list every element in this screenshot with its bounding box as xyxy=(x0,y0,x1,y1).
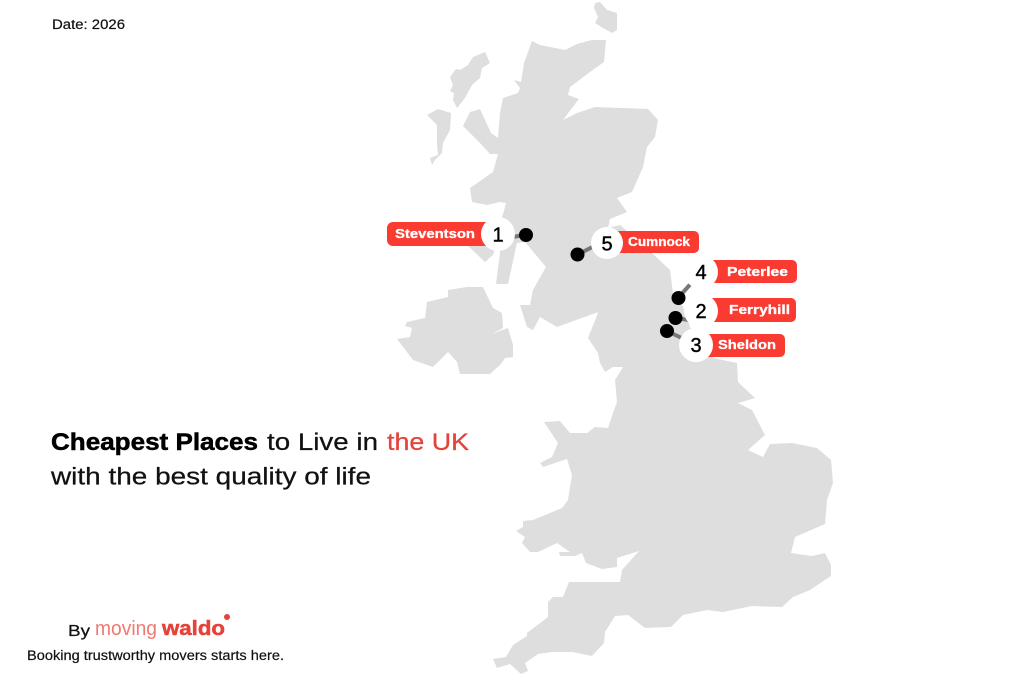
title: Cheapest Places xyxy=(51,429,258,456)
date: Date: 2026 xyxy=(52,17,125,32)
title: with the best quality of life xyxy=(50,464,371,490)
title: to Live in xyxy=(267,429,378,456)
marker 2: Ferryhill xyxy=(668,294,796,328)
marker 1: Steventson xyxy=(387,217,533,251)
marker 5: Cumnock: 5 xyxy=(601,234,613,256)
marker 4: Peterlee: Peterlee xyxy=(727,264,788,279)
tagline: Booking trustworthy movers starts here. xyxy=(27,648,284,663)
map of the UK xyxy=(397,2,833,674)
marker 5: Cumnock xyxy=(570,227,699,262)
Great Britain mainland xyxy=(463,40,833,674)
marker 5: Cumnock: Cumnock xyxy=(628,234,691,249)
moving waldo logo: By xyxy=(68,623,90,640)
marker 1: Steventson: Steventson xyxy=(395,226,475,241)
title xyxy=(50,429,469,490)
marker 4: Peterlee xyxy=(672,255,797,305)
moving waldo logo: moving xyxy=(95,618,157,640)
moving waldo logo: waldo xyxy=(161,618,225,640)
marker 2: Ferryhill: 2 xyxy=(695,301,707,323)
Shetland xyxy=(594,2,617,33)
Outer Hebrides north xyxy=(450,52,490,108)
Northern Ireland xyxy=(397,287,513,374)
marker 1: Steventson: 1 xyxy=(492,224,504,246)
marker 3: Sheldon: 3 xyxy=(690,335,702,357)
Outer Hebrides south xyxy=(427,109,451,165)
marker 2: Ferryhill: Ferryhill xyxy=(729,302,790,317)
title: the UK xyxy=(387,429,469,456)
marker 4: Peterlee: 4 xyxy=(695,262,707,284)
marker 3: Sheldon xyxy=(660,324,785,362)
moving waldo logo xyxy=(68,614,230,640)
marker 3: Sheldon: Sheldon xyxy=(718,337,776,352)
